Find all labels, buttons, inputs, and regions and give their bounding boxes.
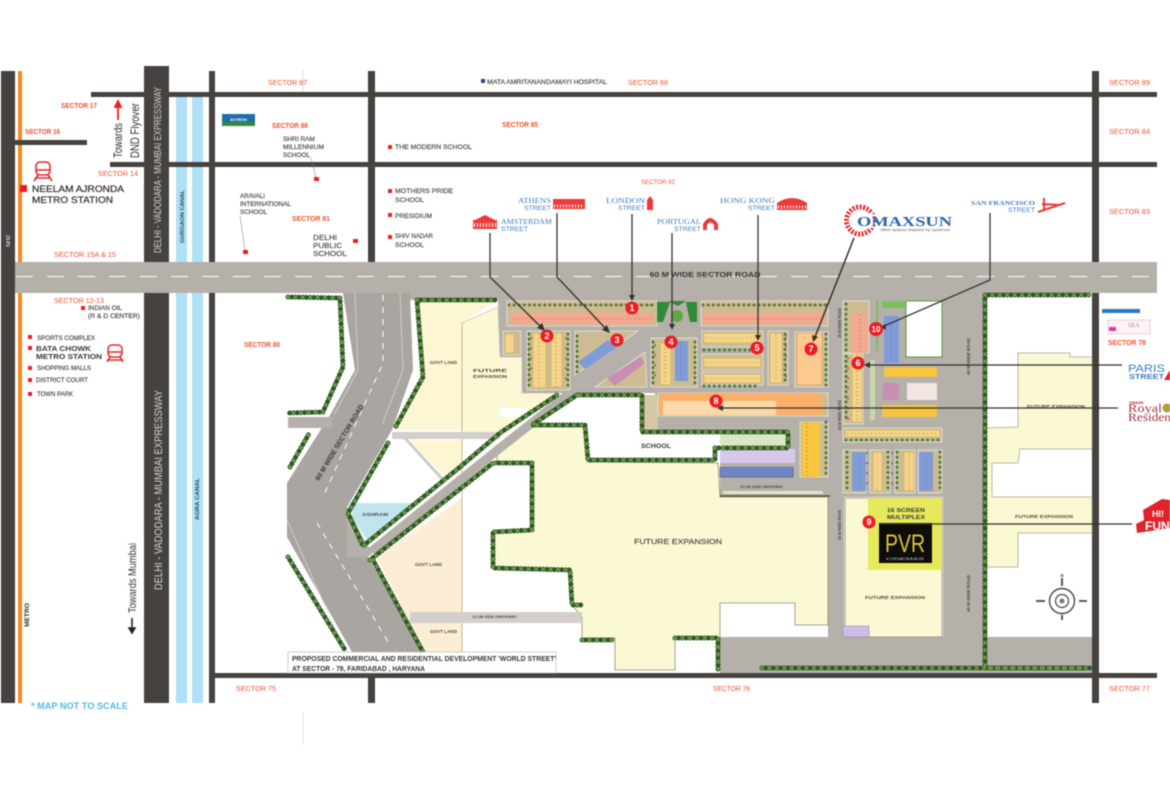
Aravali school: SCHOOL — [240, 210, 268, 216]
sector 85 schools: SCHOOL — [395, 197, 424, 204]
Paris Street logo — [1128, 363, 1170, 381]
Royal Residences logo: Royal — [1128, 401, 1163, 415]
sector labels and schools: SECTOR 84 — [1109, 129, 1150, 136]
left column labels: SECTOR 16 — [25, 129, 60, 136]
sector 85 schools: SHIV NADAR — [395, 233, 433, 240]
site labels — [315, 270, 1085, 634]
sector labels and schools: SECTOR 89 — [1109, 80, 1150, 87]
title box — [288, 652, 556, 673]
Omaxsun logo — [846, 207, 952, 234]
London Street — [606, 196, 653, 212]
site labels: GOVT LAND — [430, 629, 458, 634]
NH2 highway — [1, 71, 15, 703]
Shri Ram school: SCHOOL — [283, 152, 310, 159]
Athens Street: ATHENS — [518, 197, 551, 205]
site labels: 40 M WIDE ROAD — [966, 337, 971, 375]
sector labels and schools: SECTOR 77 — [1109, 686, 1150, 693]
sector 85 schools: MOTHERS PRIDE — [395, 188, 454, 195]
numbered markers: 4 — [668, 337, 674, 347]
Delhi Public School: DELHI — [313, 235, 337, 242]
PVR multiplex: CINEMAS — [886, 556, 925, 561]
Portugal Street: PORTUGAL — [657, 218, 701, 226]
govt land north — [395, 300, 497, 430]
Shri Ram school: SHRI RAM — [283, 136, 315, 143]
vertical road and canal labels: DELHI - VADODARA - MUMBAI EXPRESSWAY — [153, 389, 165, 590]
sector labels and schools: SECTOR 88 — [628, 80, 668, 87]
Hi Fun logo — [1136, 499, 1170, 533]
indian oil: INDIAN OIL — [88, 306, 123, 312]
site labels: FUTURE EXPANSION — [865, 595, 925, 600]
indian oil: (R & D CENTER) — [88, 314, 140, 320]
left column labels: SECTOR 14 — [98, 171, 138, 178]
arrow: towards DND flyover — [115, 101, 121, 120]
numbered markers: 3 — [614, 335, 620, 345]
sector roads — [15, 71, 1157, 703]
site labels: SCHOOL — [641, 444, 671, 450]
sector labels and schools: SECTOR 92 — [641, 180, 676, 186]
clubhouse greens — [720, 432, 788, 449]
Paris Street logo: PARIS — [1128, 363, 1165, 375]
Gurgaon and Agra canals — [176, 97, 203, 703]
site plan — [287, 270, 1092, 673]
site labels: 24 M WIDE ROAD — [837, 399, 842, 430]
site labels: FUTURE EXPANSION — [1027, 404, 1085, 409]
numbered markers: 5 — [754, 343, 760, 353]
Omaxsun logo: OMAXSUN — [857, 215, 952, 230]
ashram — [352, 503, 417, 540]
vertical road and canal labels: METRO — [25, 603, 31, 627]
sector 85 schools: THE MODERN SCHOOL — [395, 144, 472, 151]
left column labels — [6, 87, 201, 711]
callout arrows — [490, 213, 1132, 524]
Shri Ram school — [283, 136, 324, 181]
sector labels and schools: SECTOR 85 — [502, 122, 538, 129]
site labels: GOVT LAND — [430, 360, 458, 365]
vertical road and canal labels — [6, 87, 201, 627]
site labels: 24 M WIDE ROAD — [837, 307, 842, 338]
future expansion far east — [985, 353, 1092, 567]
metro line — [18, 71, 22, 703]
sector labels and schools — [222, 79, 1150, 693]
site labels: 24 M WIDE ROAD — [837, 509, 842, 540]
expressway — [144, 66, 169, 703]
local amenities list: DISTRICT COURT — [36, 378, 88, 384]
vertical road and canal labels: AGRA CANAL — [195, 477, 201, 520]
sector 85 schools: SCHOOL — [395, 242, 424, 249]
sector 85 schools: PRESIDIUM — [395, 213, 432, 220]
future expansion north — [462, 307, 557, 433]
tree rows — [288, 295, 1092, 670]
site labels: EXPANSION — [473, 374, 507, 379]
govt land centre — [410, 440, 462, 480]
Amsterdam Street: STREET — [501, 226, 528, 233]
driveways — [372, 389, 582, 623]
vertical road and canal labels: DELHI - VADODARA - MUMBAI EXPRESSWAY — [153, 87, 164, 253]
plot dividers — [514, 315, 891, 476]
title box: AT SECTOR - 79, FARIDABAD , HARYANA — [292, 666, 425, 673]
scale note: * MAP NOT TO SCALE — [31, 701, 128, 711]
San Francisco Street: STREET — [1008, 207, 1035, 214]
blue strips — [578, 316, 933, 491]
neighbouring logos — [1102, 309, 1150, 334]
numbered markers: 10 — [872, 325, 881, 334]
Hong Kong Street — [720, 197, 807, 212]
right edge logos — [1102, 309, 1170, 533]
golden strips — [802, 367, 937, 477]
London Street: STREET — [618, 205, 645, 212]
PVR multiplex — [879, 508, 932, 563]
site labels: FUTURE — [473, 368, 507, 373]
tan strip beside school — [642, 395, 658, 432]
future expansion centre — [493, 427, 828, 670]
site labels: GOVT LAND — [415, 562, 443, 567]
numbered markers — [540, 302, 883, 528]
purple strips — [607, 357, 899, 400]
left column labels: SECTOR 12-13 — [54, 298, 104, 305]
local amenities list: TOWN PARK — [37, 392, 73, 398]
internal roads — [410, 293, 1092, 673]
central roundabout — [657, 301, 697, 322]
Neelam Ajronda metro station — [20, 162, 124, 205]
vertical road and canal labels: GURGAON CANAL — [180, 189, 186, 243]
Aravali school: INTERNATIONAL — [240, 202, 292, 208]
site labels: 60 M WIDE SECTOR ROAD — [650, 270, 761, 279]
compass: N — [1060, 573, 1064, 578]
numbered markers: 7 — [808, 344, 814, 354]
Hi Fun logo: FUN — [1145, 519, 1170, 533]
sector labels and schools: SECTOR 87 — [268, 80, 307, 87]
vertical road and canal labels: DND Flyover — [128, 103, 142, 158]
local amenities list: SPORTS COMPLEX — [37, 336, 95, 342]
blue badge logo: ASTRON — [230, 117, 247, 122]
purple plot — [843, 626, 869, 637]
street logos — [473, 196, 1065, 234]
sector labels and schools: SECTOR 86 — [272, 123, 308, 130]
yellow strips — [505, 333, 940, 491]
site labels: FUTURE EXPANSION — [634, 539, 722, 546]
Hong Kong Street: HONG KONG — [720, 197, 775, 205]
Aravali school — [240, 194, 292, 254]
site labels: ASHRAM — [362, 512, 388, 517]
sector labels and schools: SECTOR 78 — [1108, 340, 1146, 347]
Delhi Public School — [313, 235, 358, 258]
Aravali school: ARAVALI — [240, 194, 265, 200]
Athens Street: STREET — [524, 205, 551, 212]
arrow: towards Mumbai — [129, 618, 135, 633]
local amenities list: BATA CHOWK — [36, 344, 92, 353]
site labels: 60 M WIDE SECTOR ROAD — [315, 404, 366, 482]
indian oil — [81, 306, 140, 320]
Omaxsun logo: office spaces inspired by opulence — [880, 227, 951, 232]
Portugal Street: STREET — [674, 226, 701, 233]
numbered markers: 8 — [713, 396, 719, 406]
local amenities list — [28, 335, 123, 398]
neighbouring logos: SEA — [1128, 323, 1140, 329]
PVR multiplex: PVR — [885, 530, 925, 558]
Portugal Street — [657, 218, 718, 233]
Hong Kong Street: STREET — [748, 205, 775, 212]
numbered markers: 6 — [855, 358, 861, 368]
Delhi Public School: PUBLIC — [313, 243, 342, 250]
blue badge logo — [222, 114, 255, 126]
numbered markers: 1 — [629, 303, 635, 313]
vertical road and canal labels: Towards Mumbai — [127, 543, 139, 613]
sector labels and schools: SECTOR 81 — [292, 216, 330, 223]
Royal Residences logo — [1128, 400, 1170, 424]
Shri Ram school: MILLENNIUM — [283, 144, 324, 151]
local amenities list: SHOPPING MALLS — [37, 366, 91, 372]
govt land south — [377, 498, 462, 652]
site labels: FUTURE EXPANSION — [1015, 514, 1073, 519]
local amenities list: METRO STATION — [36, 352, 102, 361]
PVR multiplex: 16 SCREEN — [887, 508, 925, 514]
sector labels and schools: SECTOR 75 — [236, 686, 276, 693]
Paris Street logo: STREET — [1129, 372, 1164, 381]
vertical road and canal labels: NH2 — [6, 235, 12, 247]
compass — [1036, 573, 1087, 620]
pink strips — [512, 313, 868, 353]
London Street: LONDON — [606, 197, 645, 205]
multiplex plot — [868, 498, 942, 570]
Neelam Ajronda metro station: METRO STATION — [32, 195, 113, 205]
PVR multiplex: MULTIPLEX — [887, 515, 925, 521]
left column labels: SECTOR 17 — [61, 103, 97, 110]
San Francisco Street: SAN FRANCISCO — [971, 200, 1035, 207]
San Francisco Street — [971, 198, 1065, 214]
left column labels: SECTOR 15A & 15 — [54, 252, 116, 259]
Royal Residences logo: OMAXE — [1129, 400, 1144, 405]
future expansion east — [845, 498, 942, 637]
plot blocks — [503, 301, 942, 493]
Neelam Ajronda metro station: NEELAM AJRONDA — [32, 184, 124, 194]
diagonal 60 m road — [287, 293, 423, 652]
Athens Street — [518, 197, 585, 212]
site labels: CLUB SIDE DRIVEWAY — [740, 485, 784, 489]
sector labels and schools: SECTOR 76 — [713, 686, 750, 693]
Amsterdam Street: AMSTERDAM — [501, 218, 553, 226]
sector 85 schools — [388, 144, 472, 249]
sector labels and schools: SECTOR 80 — [244, 342, 280, 349]
Delhi Public School: SCHOOL — [313, 251, 347, 258]
Hi Fun logo: HI! — [1152, 509, 1164, 519]
sector labels and schools: SECTOR 83 — [1109, 209, 1150, 216]
vertical road and canal labels: Towards — [111, 123, 125, 158]
hospital: MATA AMRITANANDAMAYI HOSPITAL — [487, 80, 608, 86]
orange buildings — [797, 333, 822, 385]
site labels: 40 M WIDE ROAD — [966, 574, 971, 612]
land parcels — [352, 300, 1092, 670]
numbered markers: 2 — [544, 331, 550, 341]
title box: PROPOSED COMMERCIAL AND RESIDENTIAL DEVELOPMENT 'WORLD STREET' — [292, 656, 556, 663]
numbered markers: 9 — [866, 517, 872, 527]
Amsterdam Street — [473, 215, 553, 233]
60 m wide sector road — [15, 262, 1157, 293]
tan blocks — [503, 301, 942, 493]
site labels: CLUB SIDE DRIVEWAY — [472, 615, 518, 619]
